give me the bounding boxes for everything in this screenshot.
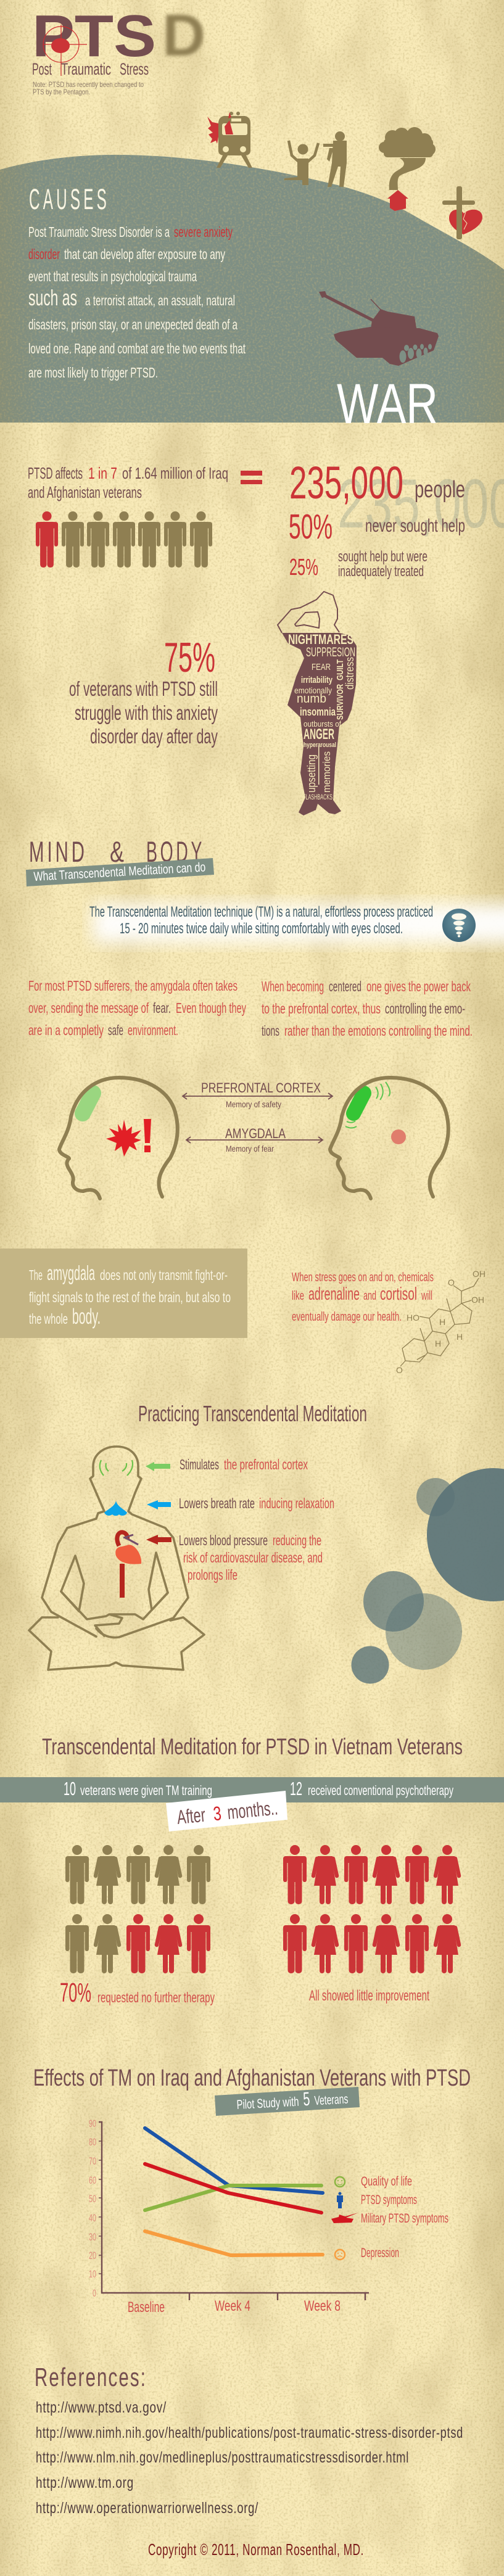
icon: cortisol molecule: H — [456, 1332, 463, 1342]
text: amygdala column: over, sending the message of — [28, 1000, 149, 1016]
text: stress chemicals: will — [421, 1289, 432, 1303]
text: reference list: http://www.tm.org — [36, 2474, 134, 2491]
callout: after 3 months: months.. — [226, 1796, 279, 1823]
icon: fear burst — [106, 1120, 141, 1157]
panel: amygdala note — [0, 1249, 247, 1338]
chart axis labels: 70 — [89, 2155, 96, 2167]
heading: references: References: — [35, 2363, 147, 2392]
text: blood pressure: reducing the — [273, 1532, 321, 1548]
text: blood pressure: risk of cardiovascular disease, and — [183, 1550, 323, 1566]
stat: 50% — [289, 507, 465, 547]
heading: mind and body: MIND — [29, 835, 88, 868]
icon: cortisol molecule — [396, 1269, 485, 1375]
chart axis labels: 10 — [89, 2268, 96, 2280]
subtitle: Post Traumatic Stress: Stress — [120, 60, 149, 78]
text: causes paragraph: severe anxiety — [174, 224, 233, 240]
saluting soldier word cloud: emotionally — [294, 685, 332, 695]
callout: after 3 months: After — [176, 1804, 207, 1828]
diagram: brain labels: AMYGDALA — [225, 1126, 286, 1141]
icon: tank — [319, 291, 439, 366]
text: causes paragraph: disasters, prison stay, or an unexpected death of a — [28, 316, 238, 332]
note: Note: PTSD has recently been changed to — [33, 80, 144, 89]
text: stress chemicals: adrenaline — [308, 1284, 360, 1304]
text: stress chemicals: like — [292, 1289, 304, 1303]
banner: what TM can do: What Transcendental Meditation can do — [33, 860, 206, 884]
stat: 50%: 50% — [289, 507, 333, 547]
subtitle: Post Traumatic Stress: Post — [32, 60, 52, 78]
stat: 70%: 70% — [60, 1978, 91, 2008]
icon: hostage and gunman — [284, 131, 347, 187]
saluting soldier word cloud: FLASHBACKS — [303, 793, 333, 801]
diagram: head with calm response — [330, 1078, 448, 1199]
text: stress chemicals — [292, 1271, 434, 1324]
panel: amygdala note: the whole — [29, 1311, 68, 1327]
text: centered column — [262, 978, 473, 1039]
callout: after 3 months — [166, 1791, 287, 1831]
note: PTS by the Pentagon. — [33, 88, 90, 96]
banner: pilot study: 5 — [302, 2088, 310, 2110]
heading: practicing TM: Practicing Transcendental Meditation — [138, 1401, 367, 1426]
text: blood pressure: prolongs life — [188, 1567, 238, 1583]
icon: cortisol molecule: H — [435, 1339, 441, 1348]
arrow: green — [146, 1462, 170, 1471]
diagram: brain labels — [183, 1080, 333, 1154]
stat: 75%: disorder day after day — [90, 725, 218, 748]
text: reference list: http://www.operationwarriorwellness.org/ — [36, 2500, 258, 2517]
text: breath rate: Lowers breath rate — [179, 1495, 255, 1511]
text: centered column: When becoming — [262, 978, 324, 994]
chart axis labels — [89, 2118, 96, 2299]
banner: pilot study: Veterans — [314, 2092, 349, 2108]
saluting soldier word cloud: upsetting — [305, 754, 318, 793]
stat: 25% — [289, 548, 428, 580]
chart x labels — [128, 2298, 341, 2316]
icon: meditation orb — [442, 909, 476, 942]
diagram: meditating figure — [29, 1447, 204, 1670]
subtitle: Post Traumatic Stress — [32, 60, 149, 78]
icon: cortisol molecule: HO — [407, 1313, 419, 1323]
stat: 75% — [69, 634, 218, 748]
chart axis labels: 90 — [89, 2118, 96, 2129]
saluting soldier word cloud: irritability — [301, 675, 333, 685]
icon: heart — [115, 1532, 141, 1598]
legend: quality of life — [335, 2174, 412, 2189]
legend: military PTSD symptoms: Military PTSD symptoms — [361, 2211, 448, 2226]
heading: mind and body: BODY — [146, 835, 205, 868]
band: study groups: veterans were given TM training — [80, 1783, 212, 1798]
stat: 75%: 75% — [164, 634, 215, 681]
stat: 70% — [60, 1978, 215, 2008]
legend: military PTSD symptoms — [331, 2211, 448, 2226]
text: blood pressure — [179, 1532, 323, 1583]
heading: mind and body — [29, 835, 205, 868]
text: amygdala column: For most PTSD sufferers, the amygdala often takes — [28, 978, 238, 994]
icon: cortisol molecule: H — [439, 1317, 445, 1327]
chart axis labels: 80 — [89, 2136, 96, 2148]
panel: amygdala note: amygdala — [47, 1261, 95, 1284]
diagram: brain labels: Memory of fear — [226, 1144, 274, 1154]
saluting soldier word cloud: NIGHTMARES — [288, 632, 353, 647]
chart axis labels: 30 — [89, 2231, 96, 2243]
text: stimulates — [180, 1456, 308, 1472]
text: 1 in 7 statistic: PTSD affects — [28, 464, 83, 482]
arrow: red — [146, 1535, 171, 1545]
diagram: brain labels: Memory of safety — [226, 1099, 281, 1109]
panel: causes hill — [0, 155, 504, 423]
panel: amygdala note: does not only transmit fight-or- — [100, 1267, 228, 1283]
text: amygdala column: fear. — [153, 1000, 171, 1016]
text: causes paragraph: that can develop after exposure to any — [64, 246, 225, 262]
saluting soldier word cloud: SUPPRESION — [306, 645, 355, 659]
chart axis labels: 20 — [89, 2250, 96, 2261]
legend: quality of life: Quality of life — [361, 2174, 412, 2189]
stat: 235,000 people: people — [415, 477, 465, 503]
text: causes paragraph: are most likely to trigger PTSD. — [28, 365, 158, 381]
band: study groups: 12 — [290, 1778, 302, 1799]
heading: causes: CAUSES — [29, 183, 110, 215]
diagram: brain labels: PREFRONTAL CORTEX — [201, 1080, 321, 1096]
note — [33, 80, 144, 96]
stat: 25%: 25% — [289, 555, 318, 580]
stat: 70%: requested no further therapy — [97, 1989, 215, 2005]
text: centered column: tions — [262, 1023, 279, 1039]
legend: depression — [335, 2246, 399, 2260]
stat: 75%: of veterans with PTSD still — [69, 677, 218, 700]
line chart — [89, 2118, 369, 2316]
chart x labels: Week 8 — [304, 2298, 341, 2314]
icon: cross and broken heart — [442, 186, 482, 239]
text: stress chemicals: eventually damage our health. — [292, 1310, 402, 1324]
stat: 235,000 people: 235,000 — [289, 457, 403, 508]
text: breath rate: inducing relaxation — [259, 1495, 334, 1511]
pictogram: psychotherapy group — [283, 1845, 459, 1973]
text: blood pressure: Lowers blood pressure — [179, 1532, 268, 1548]
text: causes paragraph: a terrorist attack, an assualt, natural — [85, 292, 235, 308]
chart axis labels: 0 — [93, 2287, 96, 2299]
text: amygdala column: safe — [108, 1022, 123, 1038]
chart axis labels: 50 — [89, 2193, 96, 2205]
pictogram: 7 people — [36, 511, 212, 568]
chart axes — [99, 2122, 369, 2300]
text: causes paragraph: loved one. Rape and combat are the two events that — [28, 341, 246, 357]
saluting soldier word cloud: distress — [344, 657, 356, 690]
text: stimulates: the prefrontal cortex — [224, 1456, 308, 1472]
text: causes paragraph: disorder — [28, 246, 60, 262]
text: causes paragraph: Post Traumatic Stress Disorder is a — [28, 224, 170, 240]
label: war: WAR — [337, 373, 438, 436]
logo: PTSD — [32, 2, 205, 76]
text: amygdala column: are in a completly — [28, 1022, 104, 1038]
saluting soldier word cloud: hyperarousal — [304, 741, 336, 749]
text: reference list: http://www.ptsd.va.gov/ — [36, 2399, 167, 2416]
logo: PTSD: PTS — [32, 3, 156, 69]
stat: 75%: struggle with this anxiety — [75, 701, 218, 724]
panel: amygdala note: The — [29, 1267, 43, 1283]
chart x labels: Baseline — [128, 2299, 165, 2316]
text: stress chemicals: cortisol — [380, 1284, 417, 1304]
heading: mind and body: & — [110, 835, 124, 868]
text: stimulates: Stimulates — [180, 1456, 219, 1472]
icon: target crosshair — [43, 25, 87, 76]
icon: equals sign — [241, 471, 262, 484]
pictogram: TM group — [65, 1845, 210, 1973]
saluting soldier word cloud — [278, 592, 357, 815]
panel: amygdala note: body. — [72, 1305, 101, 1329]
stat: 25%: inadequately treated — [338, 563, 424, 580]
text: 1 in 7 statistic: 1 in 7 — [88, 464, 117, 482]
panel: TM description glow — [93, 904, 504, 943]
text: causes paragraph — [28, 224, 246, 381]
text: 1 in 7 statistic — [28, 464, 228, 502]
text: amygdala column: environment. — [128, 1022, 178, 1038]
text: reference list — [36, 2399, 463, 2517]
saluting soldier word cloud: numb — [297, 692, 326, 706]
text: centered column: centered — [329, 978, 361, 994]
saluting soldier word cloud: GUILT — [335, 659, 345, 680]
band: study groups: 10 — [64, 1778, 76, 1799]
icon: cortisol molecule: OH — [473, 1269, 485, 1279]
chart x labels: Week 4 — [215, 2298, 250, 2314]
subtitle: Post Traumatic Stress: Traumatic — [61, 60, 111, 78]
panel: amygdala note: flight signals to the rest of the brain, but also to — [29, 1289, 231, 1305]
icon: cortisol molecule: O — [448, 1278, 455, 1287]
logo: PTSD: D — [162, 2, 205, 68]
text: 1 in 7 statistic: of 1.64 million of Iraq — [122, 464, 228, 482]
text: centered column: to the prefrontal cortex, thus — [262, 1001, 381, 1017]
saluting soldier word cloud: SURVIVOR — [335, 684, 345, 720]
text: amygdala column: Even though they — [176, 1000, 246, 1016]
banner: pilot study: Pilot Study with — [236, 2095, 299, 2112]
copyright: Copyright © 2011, Norman Rosenthal, MD. — [148, 2540, 364, 2559]
icon: train bombing — [207, 112, 252, 168]
text: 1 in 7 statistic: and Afghanistan veterans — [28, 483, 142, 502]
diagram: head with fear response — [59, 1078, 178, 1199]
saluting soldier word cloud: FEAR — [312, 662, 331, 672]
stat: 25%: sought help but were — [338, 548, 428, 565]
legend: depression: Depression — [361, 2246, 399, 2260]
decorative bubbles — [352, 1468, 504, 1684]
band: study groups — [0, 1777, 504, 1802]
icon: cortisol molecule: O — [396, 1365, 403, 1375]
arrow: blue — [147, 1500, 171, 1509]
saluting soldier word cloud: outbursts of — [304, 719, 341, 729]
text: causes paragraph: event that results in psychological trauma — [28, 268, 197, 284]
callout: after 3 months: 3 — [212, 1802, 222, 1825]
saluting soldier word cloud: insomnia — [300, 706, 336, 718]
chart axis labels: 40 — [89, 2212, 96, 2224]
legend: PTSD symptoms — [337, 2192, 417, 2208]
chart axis labels: 60 — [89, 2174, 96, 2186]
stat: little improvement: All showed little improvement — [309, 1988, 429, 2004]
icon: cortisol molecule: OH — [471, 1295, 484, 1305]
saluting soldier word cloud: memories — [321, 751, 333, 793]
saluting soldier word cloud: ANGER — [304, 726, 334, 743]
icon: tornado over burning house — [379, 127, 436, 211]
text: TM description — [89, 904, 433, 937]
icon: lungs — [104, 1501, 127, 1516]
text: amygdala column — [28, 978, 246, 1038]
chart lines — [145, 2128, 323, 2255]
text: stress chemicals: and — [363, 1289, 376, 1303]
banner: what TM can do — [26, 858, 214, 886]
banner: pilot study — [215, 2086, 360, 2116]
text: causes paragraph: such as — [28, 285, 77, 310]
legend: PTSD symptoms: PTSD symptoms — [361, 2193, 417, 2207]
